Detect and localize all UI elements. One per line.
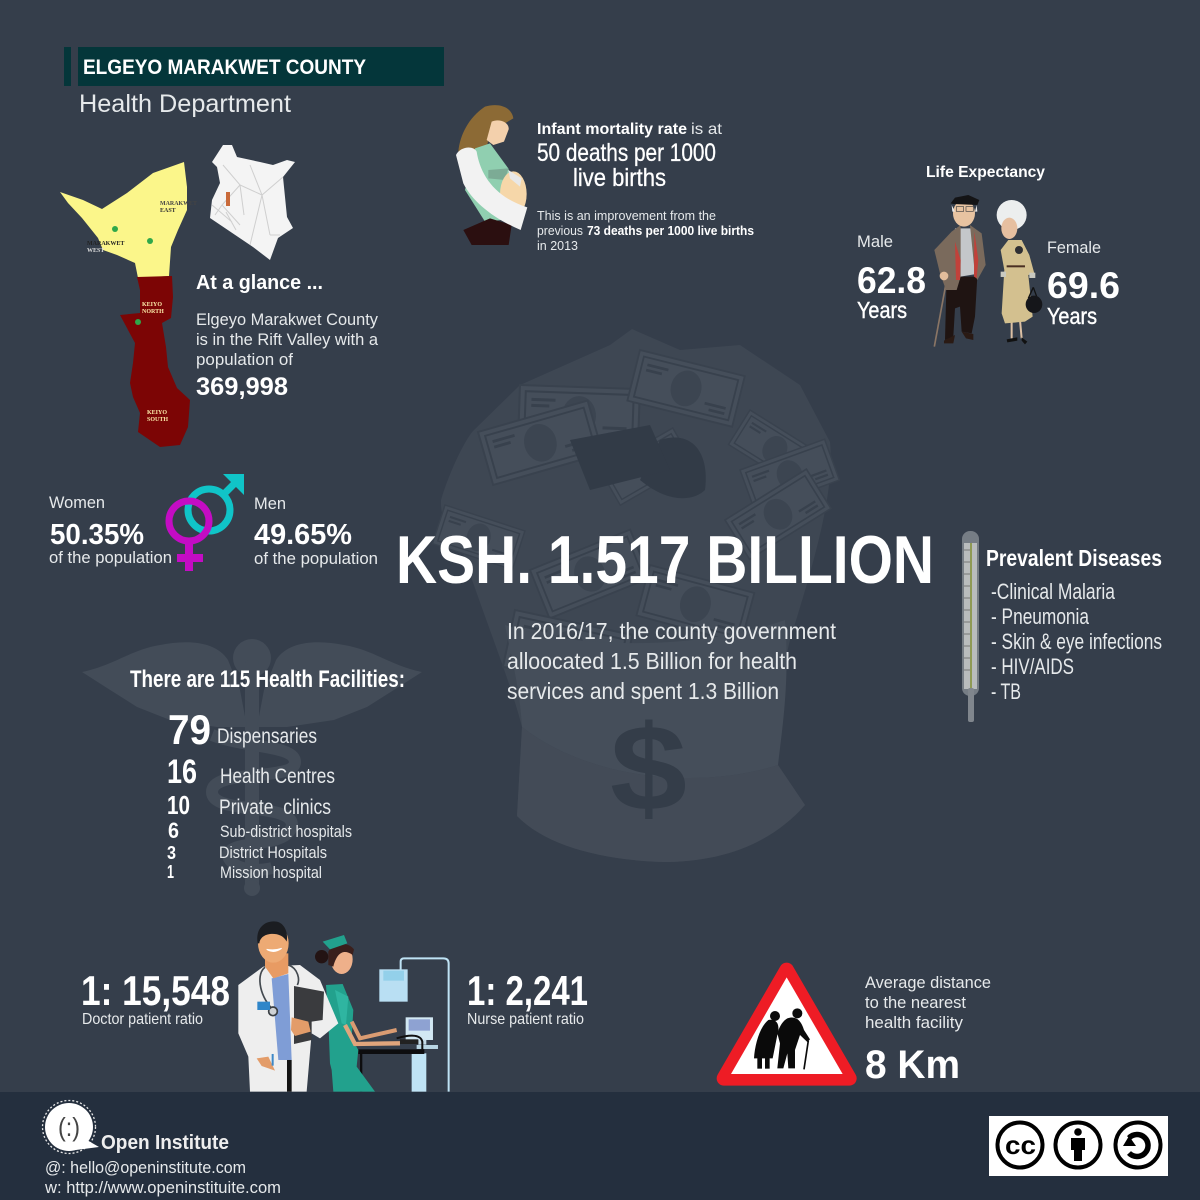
- stat: nurse patient ratio: Nurse patient ratio: [467, 1011, 584, 1028]
- budget description: [507, 618, 837, 704]
- creative commons badge: cc: [1005, 1130, 1036, 1160]
- at a glance text: [196, 272, 379, 401]
- icon: gender symbols: [169, 474, 244, 571]
- stat: men share: Men: [254, 494, 286, 513]
- illustration: doctor, nurse and equipment: [238, 921, 449, 1092]
- contact details: @: hello@openinstitute.com: [45, 1158, 246, 1177]
- stat: nurse patient ratio: 1: 2,241: [467, 967, 588, 1014]
- infant mortality text: 73 deaths per 1000 live births: [587, 224, 754, 238]
- map: Elgeyo Marakwet county: NORTH: [142, 309, 164, 315]
- stat: distance to nearest facility: 8 Km: [865, 1043, 960, 1087]
- stat: men share: [254, 494, 378, 568]
- contact details: [44, 1158, 281, 1197]
- at a glance text: is in the Rift Valley with a: [196, 330, 379, 349]
- map: Elgeyo Marakwet county: WEST: [87, 248, 104, 254]
- at a glance text: At a glance ...: [196, 272, 323, 294]
- health facilities counts: District Hospitals: [219, 843, 327, 862]
- equipment: [358, 958, 449, 1092]
- infant mortality text: This is an improvement from the: [537, 209, 716, 223]
- stat: female life expectancy: Years: [1047, 303, 1097, 329]
- background illustration: money bag: [432, 329, 839, 862]
- infant mortality text: previous: [537, 224, 583, 238]
- health facilities counts: Mission hospital: [220, 863, 322, 882]
- stat: female life expectancy: Female: [1047, 239, 1101, 257]
- background illustration: money bag: $: [610, 700, 687, 836]
- map: Kenya locator: [210, 145, 295, 260]
- footer band: [0, 1092, 1200, 1200]
- prevalent diseases list: - Pneumonia: [991, 604, 1090, 629]
- life expectancy heading: Life Expectancy: [926, 164, 1045, 181]
- at a glance text: population of: [196, 350, 293, 369]
- map: Elgeyo Marakwet county: [60, 162, 197, 447]
- map: Elgeyo Marakwet county: MARAKWET: [87, 241, 124, 247]
- map: Elgeyo Marakwet county: KEIYO: [142, 302, 162, 308]
- infant mortality text: Infant mortality rate: [537, 121, 687, 138]
- stat: distance to nearest facility: Average distance: [865, 973, 991, 992]
- budget headline: KSH. 1.517 BILLION: [396, 522, 934, 598]
- health facilities counts: 1: [167, 862, 174, 882]
- background illustration: caduceus: [82, 639, 422, 896]
- map: Elgeyo Marakwet county: EAST: [160, 208, 176, 214]
- stat: male life expectancy: 62.8: [857, 260, 926, 301]
- stat: distance to nearest facility: [865, 973, 991, 1087]
- icon: elderly crossing road sign: [724, 970, 849, 1078]
- infant mortality text: is at: [691, 121, 723, 138]
- stat: men share: 49.65%: [254, 519, 352, 551]
- logo: Open Institute: (:): [58, 1112, 80, 1142]
- health facilities counts: 16: [167, 753, 197, 791]
- stat: male life expectancy: [857, 233, 926, 323]
- health facilities counts: 3: [167, 843, 176, 863]
- prevalent diseases list: [986, 545, 1162, 704]
- infant mortality text: [537, 121, 754, 253]
- health facilities counts: 6: [168, 818, 179, 843]
- subtitle: Health Department: [79, 90, 291, 118]
- stat: women share: of the population: [49, 548, 172, 567]
- title banner: [64, 47, 444, 86]
- stat: nurse patient ratio: [467, 967, 588, 1028]
- stat: distance to nearest facility: to the nearest: [865, 993, 966, 1012]
- stat: doctor patient ratio: Doctor patient ratio: [82, 1011, 203, 1028]
- health facilities heading: There are 115 Health Facilities:: [130, 666, 405, 693]
- budget description: In 2016/17, the county government: [507, 618, 837, 644]
- budget description: alloocated 1.5 Billion for health: [507, 648, 797, 674]
- health facilities counts: 79: [168, 706, 211, 753]
- logo: Open Institute: [42, 1100, 229, 1154]
- at a glance text: 369,998: [196, 373, 288, 401]
- at a glance text: Elgeyo Marakwet County: [196, 310, 378, 329]
- logo: Open Institute: Open Institute: [101, 1132, 229, 1154]
- prevalent diseases list: - HIV/AIDS: [991, 654, 1074, 679]
- stat: women share: [49, 493, 172, 567]
- stat: distance to nearest facility: health facility: [865, 1013, 963, 1032]
- stat: female life expectancy: 69.6: [1047, 265, 1120, 306]
- prevalent diseases list: -Clinical Malaria: [991, 579, 1116, 604]
- contact details: w: http://www.openinstituite.com: [44, 1178, 281, 1197]
- stat: men share: of the population: [254, 549, 378, 568]
- health facilities counts: Health Centres: [220, 765, 335, 788]
- stat: women share: 50.35%: [50, 519, 144, 551]
- doctor: [238, 921, 338, 1092]
- infant mortality text: in 2013: [537, 239, 578, 253]
- health facilities counts: Dispensaries: [217, 725, 317, 748]
- health facilities counts: Private clinics: [219, 796, 331, 819]
- stat: women share: Women: [49, 493, 105, 512]
- creative commons badge: [989, 1116, 1168, 1176]
- icon: pregnant woman: [456, 105, 527, 245]
- stat: doctor patient ratio: 1: 15,548: [81, 967, 230, 1014]
- health facilities counts: Sub-district hospitals: [220, 822, 352, 841]
- icon: elderly couple: [934, 195, 1042, 347]
- health facilities counts: 10: [167, 790, 190, 820]
- stat: male life expectancy: Male: [857, 233, 893, 251]
- map: Elgeyo Marakwet county: SOUTH: [147, 417, 168, 423]
- nurse: [315, 935, 400, 1092]
- stat: female life expectancy: [1047, 239, 1120, 329]
- infant mortality text: 50 deaths per 1000: [537, 139, 716, 167]
- map: Elgeyo Marakwet county: MARAKWET: [160, 201, 197, 207]
- health facilities counts: [167, 706, 352, 882]
- stat: male life expectancy: Years: [857, 297, 907, 323]
- prevalent diseases list: - TB: [991, 679, 1021, 704]
- stat: doctor patient ratio: [81, 967, 230, 1028]
- map: Elgeyo Marakwet county: KEIYO: [147, 410, 167, 416]
- icon: thermometer: [962, 531, 979, 722]
- budget description: services and spent 1.3 Billion: [507, 678, 779, 704]
- infant mortality text: live births: [573, 164, 666, 192]
- prevalent diseases list: Prevalent Diseases: [986, 545, 1162, 571]
- title banner: ELGEYO MARAKWET COUNTY: [83, 56, 366, 79]
